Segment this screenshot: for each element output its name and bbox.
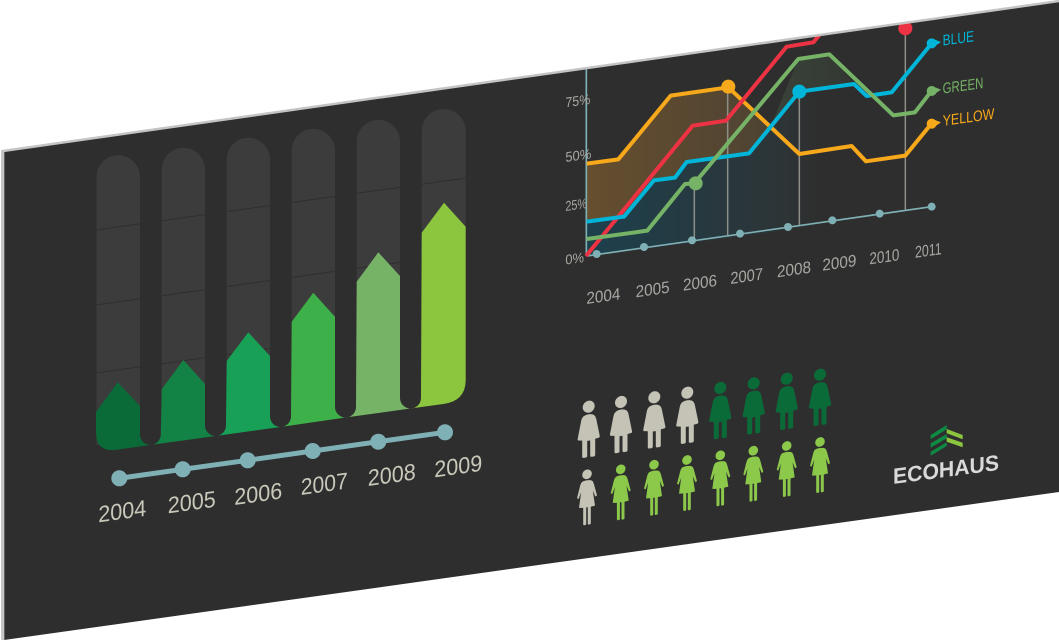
women row	[577, 436, 830, 526]
green arrow bar 2004	[96, 382, 150, 450]
year labels: 2008	[368, 458, 416, 491]
drop lines	[694, 28, 905, 241]
axes	[586, 68, 932, 256]
year axis labels: 2007	[730, 264, 763, 288]
green line	[587, 54, 941, 239]
area fills	[587, 54, 860, 256]
percent labels: 0%	[565, 249, 584, 268]
percent labels: 25%	[565, 195, 587, 214]
year axis labels: 2011	[915, 239, 942, 262]
icon: chevrons	[931, 425, 963, 456]
logo: ECOHAUS	[893, 425, 999, 489]
red line	[586, 21, 912, 256]
year axis labels: 2004	[586, 284, 620, 308]
series labels	[943, 28, 995, 130]
year labels: 2007	[301, 468, 348, 500]
panel: people pictogram	[577, 367, 831, 526]
green arrow bar 2007	[280, 293, 346, 427]
year axis labels: 2010	[869, 245, 899, 268]
year axis labels: 2009	[822, 251, 856, 275]
men row	[578, 367, 831, 459]
series labels: BLUE	[943, 28, 974, 50]
year labels: 2009	[434, 450, 482, 482]
axis points	[593, 203, 936, 258]
timeline	[111, 424, 453, 486]
blue line	[587, 38, 941, 222]
year axis labels: 2006	[683, 271, 717, 295]
year labels: 2005	[168, 486, 216, 518]
year labels: 2004	[98, 495, 146, 527]
series labels: YELLOW	[943, 106, 995, 130]
yellow line	[587, 80, 941, 164]
percent labels: 75%	[565, 91, 590, 110]
percent labels	[565, 91, 591, 268]
year labels	[98, 450, 482, 527]
percent labels: 50%	[565, 145, 591, 165]
green arrow bar 2006	[216, 332, 280, 436]
green arrow bar 2008	[346, 252, 410, 418]
bar tracks	[90, 100, 470, 450]
year labels: 2006	[234, 477, 282, 510]
year axis labels: 2008	[777, 258, 811, 281]
year axis labels: 2005	[636, 278, 670, 301]
year axis labels	[587, 243, 942, 304]
panel: line chart	[565, 21, 995, 308]
green arrow bar 2009	[410, 203, 466, 408]
panel: bar chart	[90, 100, 482, 527]
wordmark: ECOHAUS	[893, 450, 999, 489]
green arrow bar 2005	[150, 360, 216, 445]
series labels: GREEN	[943, 75, 983, 98]
